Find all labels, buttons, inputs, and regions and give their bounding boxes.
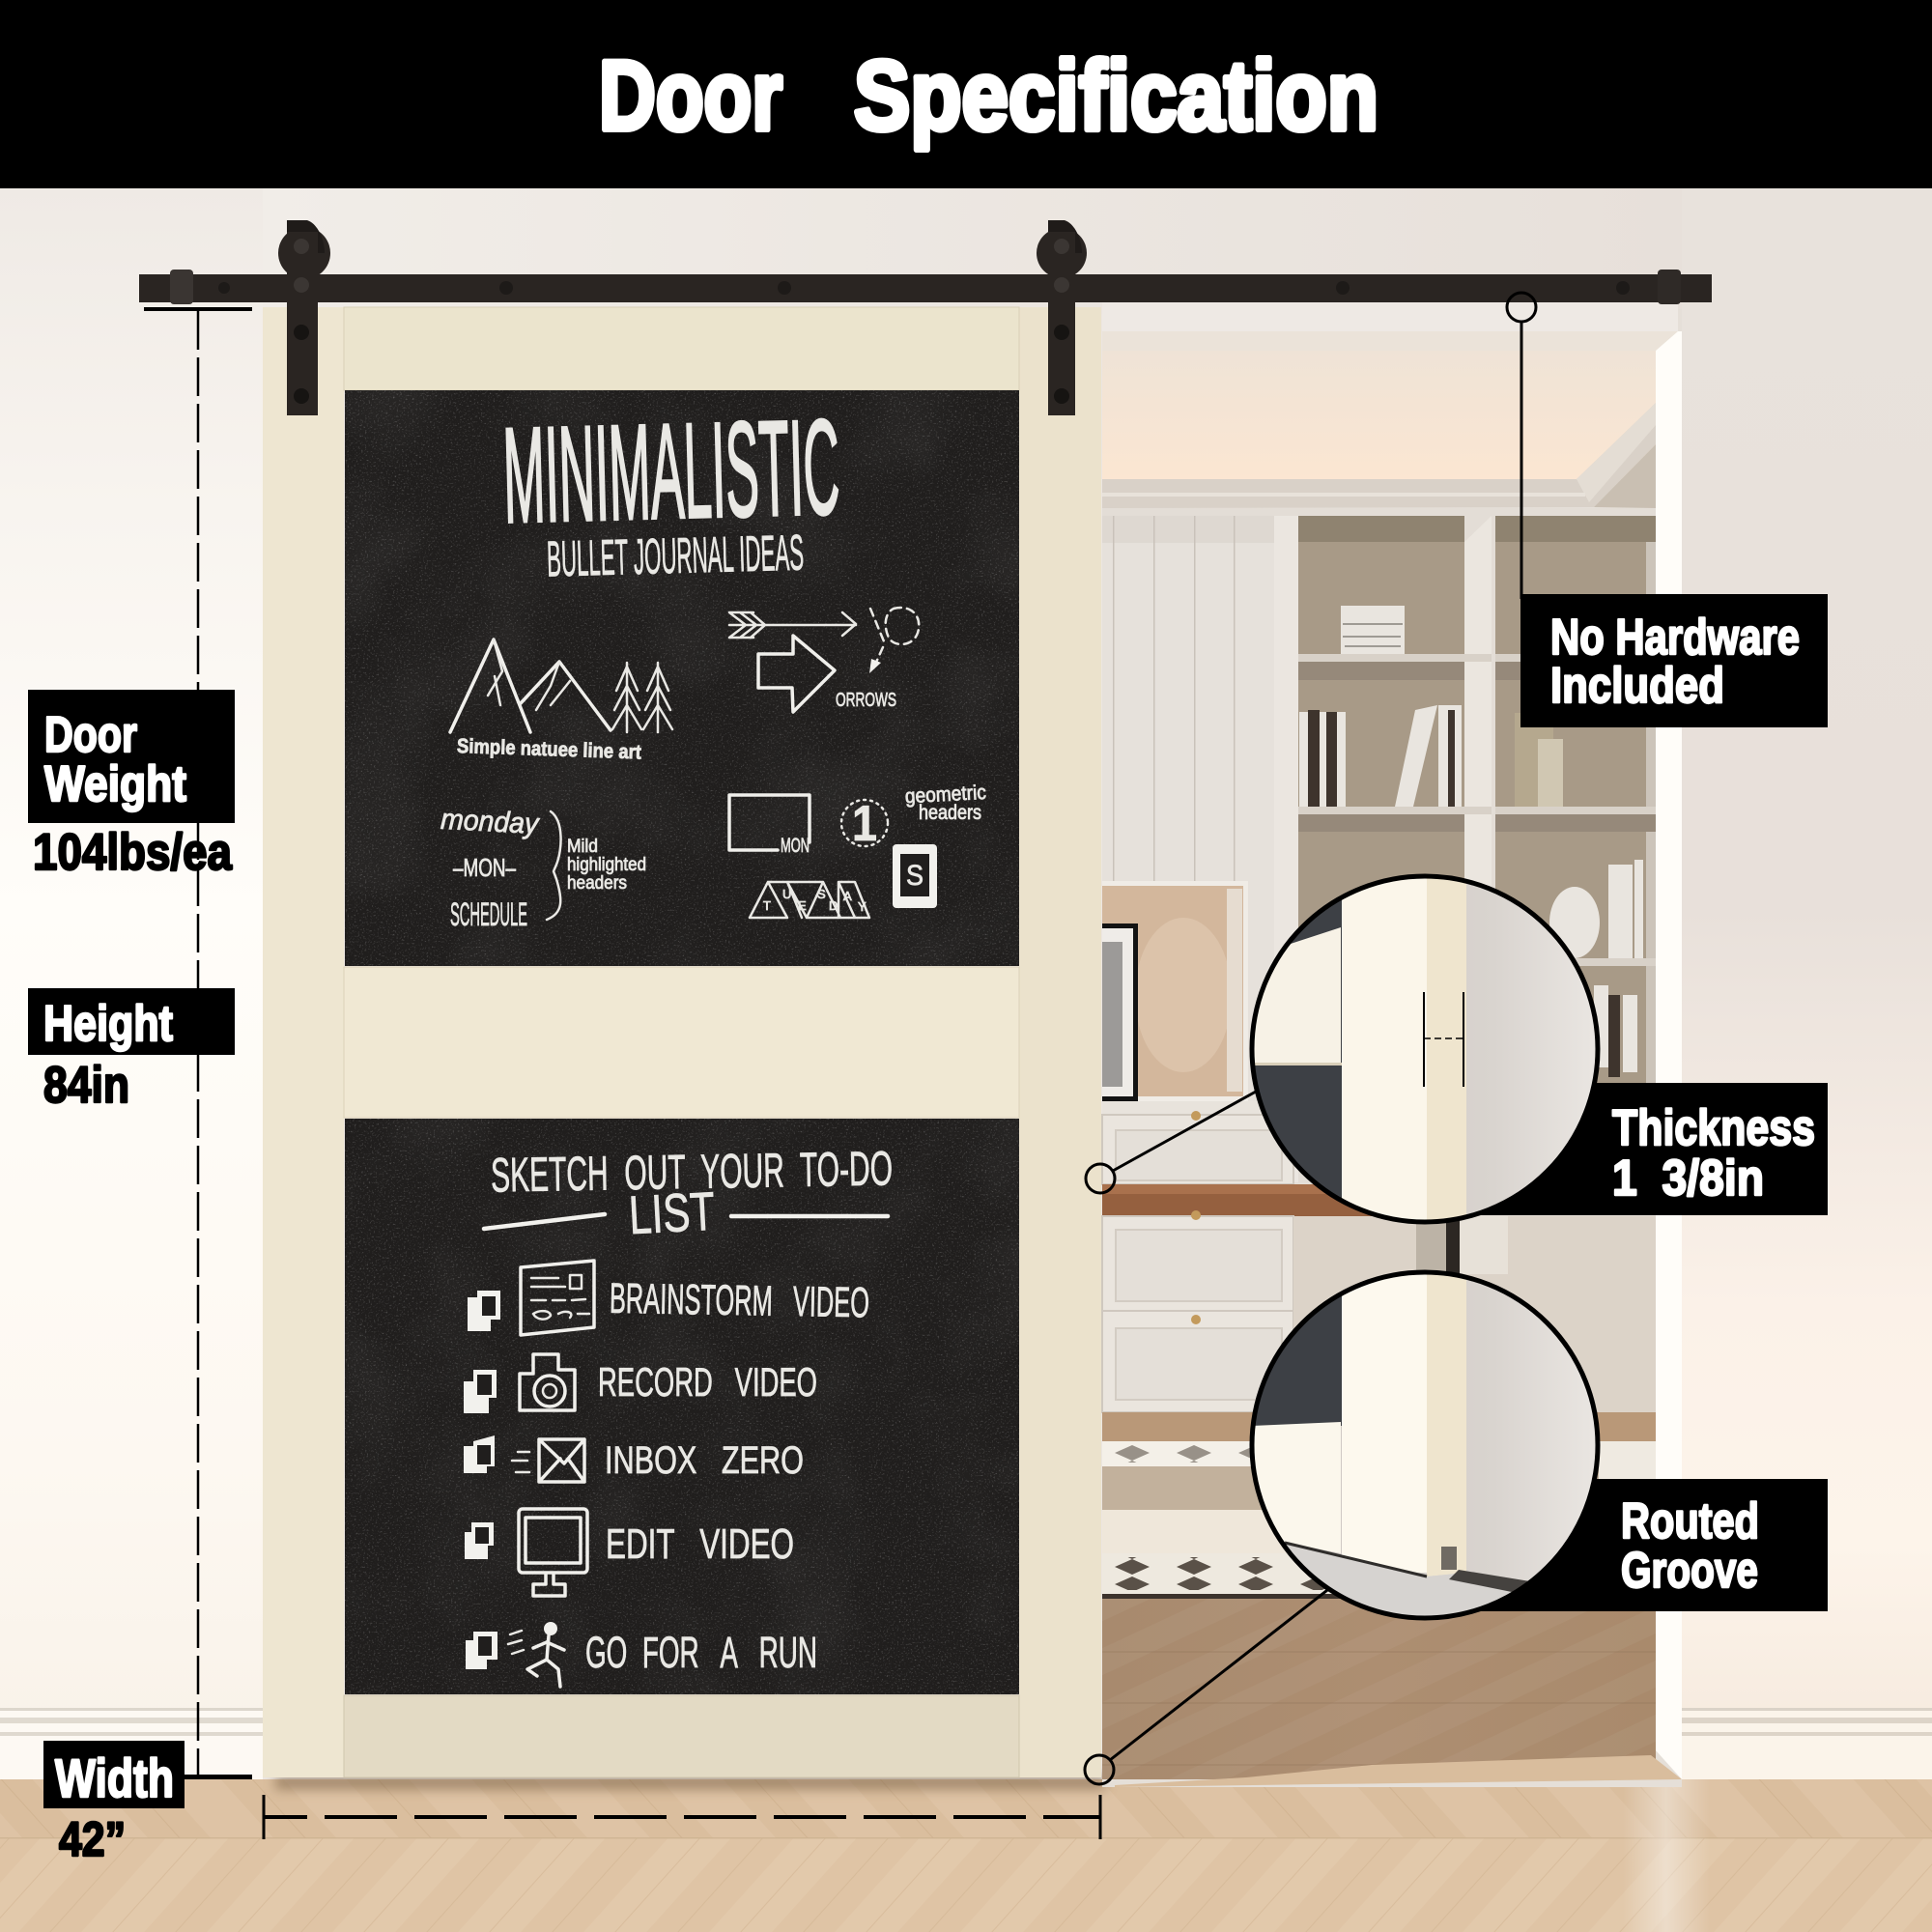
callout: no hardware included bbox=[1520, 594, 1828, 727]
geometric headers sketch: Y bbox=[858, 899, 867, 914]
list item record bbox=[464, 1354, 817, 1413]
books on shelves bbox=[1299, 606, 1643, 1072]
herringbone floor bbox=[0, 1776, 1932, 1932]
detail circle: thickness bbox=[1252, 876, 1598, 1223]
geometric headers sketch: D bbox=[829, 898, 838, 913]
shelves bbox=[1298, 654, 1656, 966]
list item edit bbox=[465, 1509, 794, 1596]
list item run: GO FOR A RUN bbox=[585, 1628, 817, 1677]
top rail bbox=[344, 307, 1019, 390]
arrows sketch bbox=[729, 608, 919, 712]
leader: routed groove bbox=[1085, 1587, 1331, 1784]
callout: thickness: Thickness bbox=[1612, 1100, 1815, 1156]
geometric headers sketch: geometric bbox=[904, 781, 986, 808]
value: width: 42” bbox=[59, 1812, 126, 1866]
list item edit: EDIT VIDEO bbox=[606, 1520, 794, 1568]
callout: routed groove bbox=[1473, 1479, 1828, 1611]
callout: thickness: 1 3/8in bbox=[1612, 1151, 1764, 1207]
geometric headers sketch: 1 bbox=[852, 796, 877, 852]
geometric headers sketch: T bbox=[763, 898, 771, 913]
geometric headers sketch: A bbox=[843, 889, 852, 903]
bookcase bbox=[1274, 516, 1656, 1182]
crown molding bbox=[1102, 403, 1656, 508]
label: height: Height bbox=[43, 996, 173, 1052]
leader: thickness bbox=[1086, 1092, 1256, 1193]
arrows sketch: ORROWS bbox=[836, 690, 896, 711]
list item run bbox=[466, 1622, 817, 1687]
highlighted headers sketch: highlighted bbox=[567, 855, 646, 875]
value: door weight: 104lbs/ea bbox=[33, 824, 232, 881]
geometric headers sketch: headers bbox=[919, 802, 981, 824]
geometric headers sketch: S bbox=[906, 860, 923, 892]
inner floor and rug bbox=[1102, 1412, 1656, 1441]
label: door weight: Weight bbox=[44, 756, 186, 812]
chalk heading to-do: SKETCH OUT YOUR TO-DO bbox=[491, 1141, 893, 1203]
list item brainstorm: BRAINSTORM VIDEO bbox=[610, 1275, 869, 1326]
rail bolts bbox=[218, 281, 1630, 295]
geometric headers sketch: E bbox=[798, 898, 807, 913]
door header bbox=[1102, 302, 1678, 331]
geometric headers sketch: MON bbox=[781, 835, 810, 857]
highlighted headers sketch: monday bbox=[440, 804, 541, 840]
detail circle: routed groove bbox=[1252, 1271, 1598, 1618]
left roller strap bbox=[278, 220, 330, 415]
header bar bbox=[0, 0, 1932, 188]
mountains and trees sketch: Simple natuee line art bbox=[457, 735, 641, 764]
upper chalkboard panel bbox=[345, 390, 1019, 966]
baseboard bbox=[0, 1708, 1932, 1779]
end stoppers bbox=[170, 270, 193, 304]
highlighted headers sketch: Mild bbox=[567, 837, 598, 857]
callout: no hardware included: Included bbox=[1550, 658, 1724, 714]
title bbox=[599, 41, 1378, 151]
label: door weight: Door bbox=[44, 707, 137, 763]
height dimension line bbox=[144, 309, 252, 1778]
chalk heading list: LIST bbox=[627, 1180, 717, 1245]
callout: routed groove: Groove bbox=[1621, 1543, 1758, 1599]
cabinet and dark column under counter bbox=[1293, 1216, 1656, 1413]
door stiles bbox=[263, 307, 344, 1777]
geometric headers sketch: S bbox=[817, 887, 826, 901]
upper chalkboard panel: BULLET JOURNAL IDEAS bbox=[546, 526, 805, 587]
highlighted headers sketch: SCHEDULE bbox=[450, 896, 527, 933]
list item brainstorm bbox=[468, 1261, 869, 1335]
right roller strap bbox=[1037, 220, 1087, 415]
counter drawers bbox=[1102, 1101, 1334, 1115]
bottom rail bbox=[344, 1695, 1019, 1777]
width dimension line bbox=[264, 1795, 1100, 1839]
door jamb bbox=[1656, 331, 1682, 1779]
list item inbox: INBOX ZERO bbox=[605, 1439, 804, 1482]
geometric headers sketch bbox=[729, 781, 986, 918]
chalk heading list bbox=[484, 1180, 888, 1245]
beadboard panel wall bbox=[1102, 516, 1274, 1173]
barn door bbox=[263, 307, 1101, 1777]
ceiling bbox=[1102, 351, 1656, 479]
list item record: RECORD VIDEO bbox=[598, 1359, 817, 1405]
value: height: 84in bbox=[43, 1057, 129, 1114]
lower chalkboard panel bbox=[345, 1119, 1019, 1694]
room interior seen through the opening bbox=[1102, 302, 1682, 1787]
upper chalkboard panel: MINIMALISTIC bbox=[501, 390, 841, 552]
callout: no hardware included: No Hardware bbox=[1550, 610, 1800, 666]
callout: thickness bbox=[1473, 1083, 1828, 1215]
thickness marker bbox=[1424, 992, 1463, 1087]
title: Specification bbox=[854, 41, 1378, 151]
middle rail bbox=[344, 967, 1019, 1118]
highlighted headers sketch: headers bbox=[567, 873, 627, 894]
mountains and trees sketch bbox=[450, 639, 672, 764]
lower room floor bbox=[1102, 1599, 1656, 1779]
geometric headers sketch: U bbox=[782, 887, 791, 901]
callout: routed groove: Routed bbox=[1621, 1493, 1759, 1549]
highlighted headers sketch: –MON– bbox=[453, 853, 516, 882]
label: height bbox=[28, 988, 235, 1055]
art frame bbox=[1102, 881, 1248, 1101]
highlighted headers sketch bbox=[440, 804, 646, 933]
leader: no hardware bbox=[1507, 293, 1536, 599]
label: door weight bbox=[28, 690, 235, 823]
list item inbox bbox=[464, 1435, 804, 1482]
label: width: Width bbox=[55, 1747, 174, 1808]
sliding track rail with hardware bbox=[139, 220, 1712, 415]
title: Door bbox=[599, 41, 782, 151]
